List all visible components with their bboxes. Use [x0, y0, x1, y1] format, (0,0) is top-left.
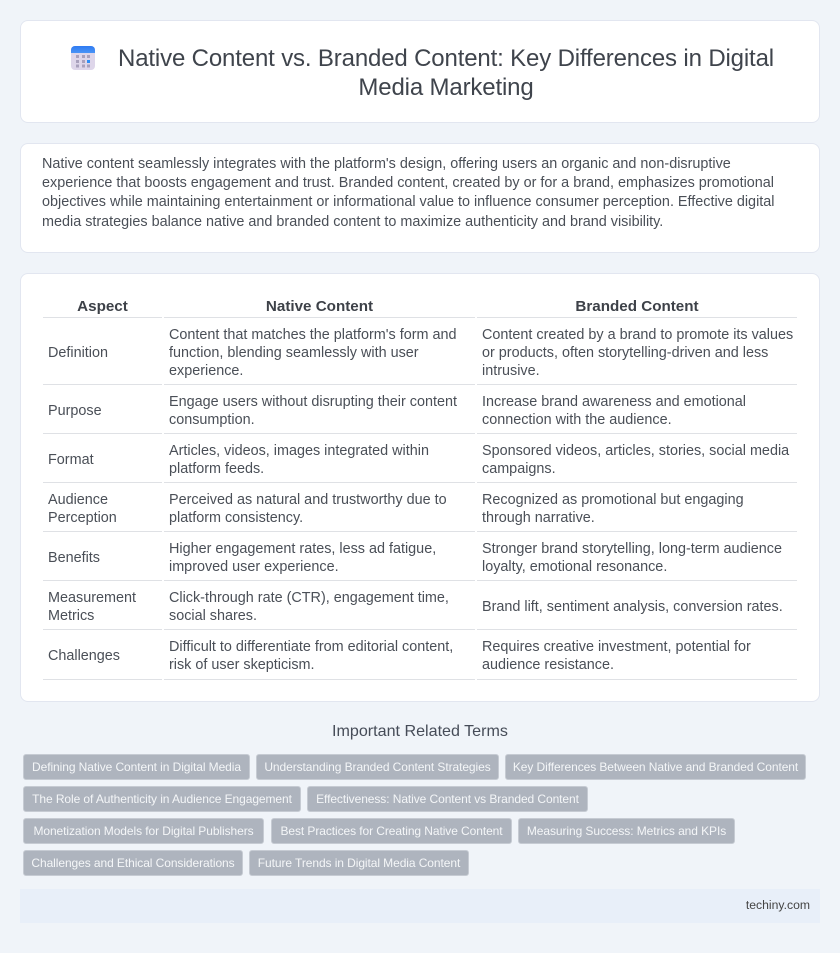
- comparison table: Recognized as promotional but engaging: [482, 492, 744, 508]
- comparison table: connection with the audience.: [482, 412, 672, 428]
- related terms heading: Important Related Terms: [332, 722, 508, 740]
- related terms tags: Measuring Success: Metrics and KPIs: [527, 824, 726, 838]
- comparison table: Sponsored videos, articles, stories, social media: [482, 443, 789, 459]
- row: Audience Perception: [48, 492, 117, 526]
- related terms tags: Defining Native Content in Digital Media: [32, 760, 241, 774]
- comparison table: Perceived as natural and trustworthy due to: [169, 492, 447, 508]
- row: Benefits: Benefits: [48, 550, 100, 566]
- comparison table: improved user experience.: [169, 559, 339, 575]
- comparison table: function, blending seamlessly with user: [169, 345, 419, 361]
- comparison table: Click-through rate (CTR), engagement time,: [169, 590, 449, 606]
- icon: calendar: [71, 46, 95, 70]
- comparison table: Higher engagement rates, less ad fatigue,: [169, 541, 436, 557]
- comparison table: social shares.: [169, 608, 257, 624]
- column header: Branded Content: [477, 298, 797, 318]
- comparison table: Stronger brand storytelling, long-term audience: [482, 541, 782, 557]
- column header: Aspect: [43, 298, 162, 318]
- description card: [20, 143, 820, 253]
- row: Audience Perception: Audience: [48, 492, 108, 508]
- related terms tags: Understanding Branded Content Strategies: [264, 760, 491, 774]
- row: Definition: Definition: [48, 345, 108, 361]
- description text: [42, 156, 774, 230]
- related terms tags: Effectiveness: Native Content vs Branded Content: [316, 792, 579, 806]
- column header: Native Content: [164, 298, 475, 318]
- row: Purpose: Purpose: [48, 403, 102, 419]
- header card: [20, 20, 820, 123]
- comparison table: Content that matches the platform's form and: [169, 327, 457, 343]
- comparison table: platform consistency.: [169, 510, 303, 526]
- comparison table: or products, often storytelling-driven and less: [482, 345, 768, 361]
- comparison table: audience resistance.: [482, 657, 614, 673]
- comparison table: Articles, videos, images integrated within: [169, 443, 429, 459]
- comparison table: Content created by a brand to promote its values: [482, 327, 793, 343]
- comparison table: campaigns.: [482, 461, 556, 477]
- row: Challenges: Challenges: [48, 648, 120, 664]
- comparison table: risk of user skepticism.: [169, 657, 315, 673]
- related terms tags: Best Practices for Creating Native Content: [280, 824, 503, 838]
- comparison table: loyalty, emotional resonance.: [482, 559, 667, 575]
- description text: media strategies balance native and branded content to maximize authenticity and brand visibility.: [42, 214, 663, 230]
- description text: Native content seamlessly integrates with the platform's design, offering users an organic and non-disruptive: [42, 156, 731, 172]
- related terms tags: Monetization Models for Digital Publishers: [33, 824, 254, 838]
- comparison table: Brand lift, sentiment analysis, conversion rates.: [482, 599, 783, 615]
- column header: Native Content: Native Content: [266, 298, 373, 315]
- title: [118, 45, 774, 101]
- comparison table: Engage users without disrupting their content: [169, 394, 457, 410]
- comparison table: experience.: [169, 363, 243, 379]
- related terms tags: [23, 754, 806, 876]
- row: Audience Perception: Perception: [48, 510, 117, 526]
- description text: objectives while maintaining entertainment or informational value to influence consumer perception. Effective digital: [42, 194, 774, 210]
- related terms tags: Future Trends in Digital Media Content: [258, 856, 460, 870]
- row: Format: Format: [48, 452, 94, 468]
- comparison table: Difficult to differentiate from editorial content,: [169, 639, 453, 655]
- comparison table: consumption.: [169, 412, 255, 428]
- description text: experience that boosts engagement and trust. Branded content, created by or for a brand, emphasizes promotional: [42, 175, 774, 191]
- row: Measurement Metrics: Metrics: [48, 608, 94, 624]
- comparison table: through narrative.: [482, 510, 595, 526]
- row: Measurement Metrics: [48, 590, 136, 624]
- footer bar: [20, 889, 820, 923]
- row: Measurement Metrics: Measurement: [48, 590, 136, 606]
- related terms tags: Key Differences Between Native and Branded Content: [513, 760, 798, 774]
- title: Native Content vs. Branded Content: Key Differences in Digital: [118, 45, 774, 72]
- footer source: techiny.com: [746, 898, 810, 912]
- column header: Branded Content: Branded Content: [575, 298, 699, 315]
- comparison table: platform feeds.: [169, 461, 264, 477]
- column header: Aspect: Aspect: [77, 298, 128, 315]
- comparison table: intrusive.: [482, 363, 540, 379]
- comparison table: Increase brand awareness and emotional: [482, 394, 746, 410]
- related terms tags: Challenges and Ethical Considerations: [31, 856, 235, 870]
- table card: [20, 273, 820, 702]
- title: Media Marketing: [358, 74, 534, 101]
- related terms tags: The Role of Authenticity in Audience Engagement: [32, 792, 292, 806]
- comparison table: Requires creative investment, potential for: [482, 639, 751, 655]
